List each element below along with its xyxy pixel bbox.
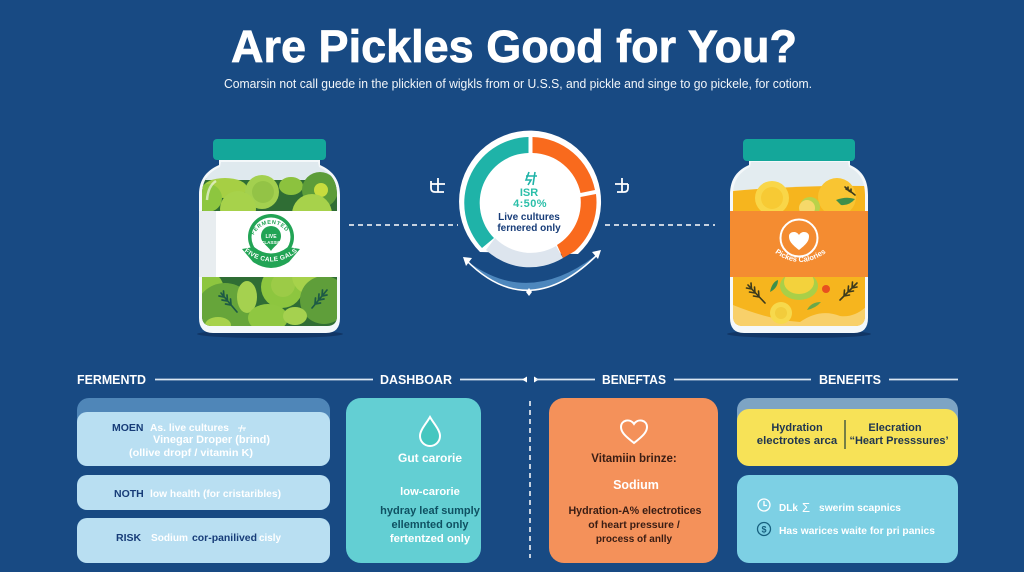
- row: risk: RISK: [116, 532, 142, 544]
- icon: left connector glyph: [431, 178, 445, 192]
- panel: hydration vs elevation: Hydration: [771, 422, 823, 434]
- panel: vitamin card: of heart pressure /: [588, 519, 680, 531]
- row: risk: cor-panilived: [192, 532, 257, 544]
- heading: fermented: FERMENTD: [77, 373, 146, 387]
- row: moen: MOEN: [112, 422, 144, 434]
- icon: right connector glyph: [615, 178, 628, 192]
- orange segment: upper: [532, 137, 595, 193]
- title: Are Pickles Good for You?: [231, 21, 797, 72]
- percentage value: 4:50%: [513, 198, 547, 210]
- grey segment: [486, 238, 563, 267]
- right jar lid: [743, 139, 855, 161]
- panel: gut health card: [346, 398, 481, 563]
- center dashed divider: [529, 401, 531, 558]
- orange segment: lower: [557, 194, 597, 258]
- row: noth: [77, 475, 330, 510]
- panel: fermented list: [77, 398, 330, 563]
- donut caption: Live cultures: [498, 212, 560, 223]
- panel: vitamin card: process of anlly: [596, 534, 673, 545]
- badge: fermented seal: LIVE: [265, 234, 277, 240]
- panel: gut health card: fertentzed only: [390, 533, 471, 545]
- row: moen: [77, 412, 330, 466]
- heading: benefits left: BENEFTAS: [602, 373, 666, 387]
- row: moen: (ollive dropf / vitamin K): [129, 447, 253, 459]
- panel: gut health card: ellemnted only: [391, 519, 469, 531]
- panel: hydration vs elevation: “Heart Presssures’: [849, 435, 949, 447]
- donut chart: [459, 131, 601, 267]
- panel: hydration vs elevation: [737, 398, 958, 466]
- icon: dollar: [758, 522, 770, 536]
- heading: benefits right: BENEFITS: [819, 373, 881, 387]
- panel: vitamin card: Hydration-A% electrotices: [568, 505, 702, 517]
- panel: gut health card: hydray leaf sumply: [380, 505, 481, 517]
- panel: hydration vs elevation: electrotes arca: [757, 435, 838, 447]
- icon: water drop: [420, 417, 440, 446]
- panel: vitamin card: Vitamiin brinze:: [591, 453, 677, 465]
- badge: fermented seal: [242, 214, 300, 268]
- row: risk: [77, 518, 330, 563]
- row: risk: cisly: [259, 532, 281, 544]
- label band: [199, 211, 340, 277]
- teal segment: [464, 137, 528, 248]
- left jar lid: [213, 139, 326, 160]
- icon: clock: [758, 499, 770, 511]
- icon: dollar: $: [761, 524, 767, 534]
- row: moen: As. live cultures: [150, 422, 229, 434]
- badge: fermented seal: CLASSIC: [261, 240, 282, 245]
- right dashed connector: [605, 224, 715, 226]
- panel: vitamin card: Sodium: [613, 478, 659, 492]
- cycle arrows under donut: [463, 250, 601, 296]
- center label: [497, 172, 561, 234]
- icon: bolt mark: [526, 172, 537, 185]
- panel: gut health card: Gut carorie: [398, 451, 462, 465]
- panel: vitamin card: [549, 398, 718, 563]
- percentage label: ISR: [520, 187, 538, 199]
- left dashed connector: [349, 224, 458, 226]
- left jar: fermented pickles: [197, 160, 343, 338]
- badge: fermented seal: FERMENTED: [252, 220, 288, 235]
- row: noth: NOTH: [114, 488, 144, 500]
- panel: swerim notes: [737, 475, 958, 563]
- subtitle: Comarsin not call guede in the plickien of wigkls from or U.S.S, and pickle and singe to go pickele, for cotiom.: [224, 76, 812, 91]
- panel: gut health card: low-carorie: [400, 486, 460, 498]
- badge: fermented seal: FIVE CALE GALS: [244, 248, 297, 262]
- panel: hydration vs elevation: Elecration: [868, 422, 922, 434]
- panel: swerim notes: swerim scapnics: [819, 503, 901, 514]
- panel: swerim notes: Σ: [802, 500, 810, 515]
- section header row: [77, 373, 958, 387]
- icon: herb sprigs: [746, 187, 857, 303]
- icon: herb sprigs: [219, 290, 327, 312]
- row: risk: Sodium: [151, 532, 188, 544]
- badge: heart seal: [775, 218, 826, 262]
- row: moen: Vinegar Droper (brind): [153, 434, 270, 446]
- glass shine: [207, 181, 216, 200]
- badge: heart seal: Pickes Calories: [775, 248, 826, 262]
- label band: [730, 211, 868, 277]
- row: noth: low health (for cristaribles): [150, 488, 281, 500]
- panel: swerim notes: Has warices waite for pri panics: [779, 526, 935, 537]
- icon: heart outline: [621, 420, 647, 443]
- donut caption line two: fernered only: [497, 223, 561, 234]
- panel: swerim notes: DLk: [779, 503, 798, 514]
- right jar: refrigerated pickles: [727, 161, 871, 338]
- heading: dashboard: DASHBOAR: [380, 373, 452, 387]
